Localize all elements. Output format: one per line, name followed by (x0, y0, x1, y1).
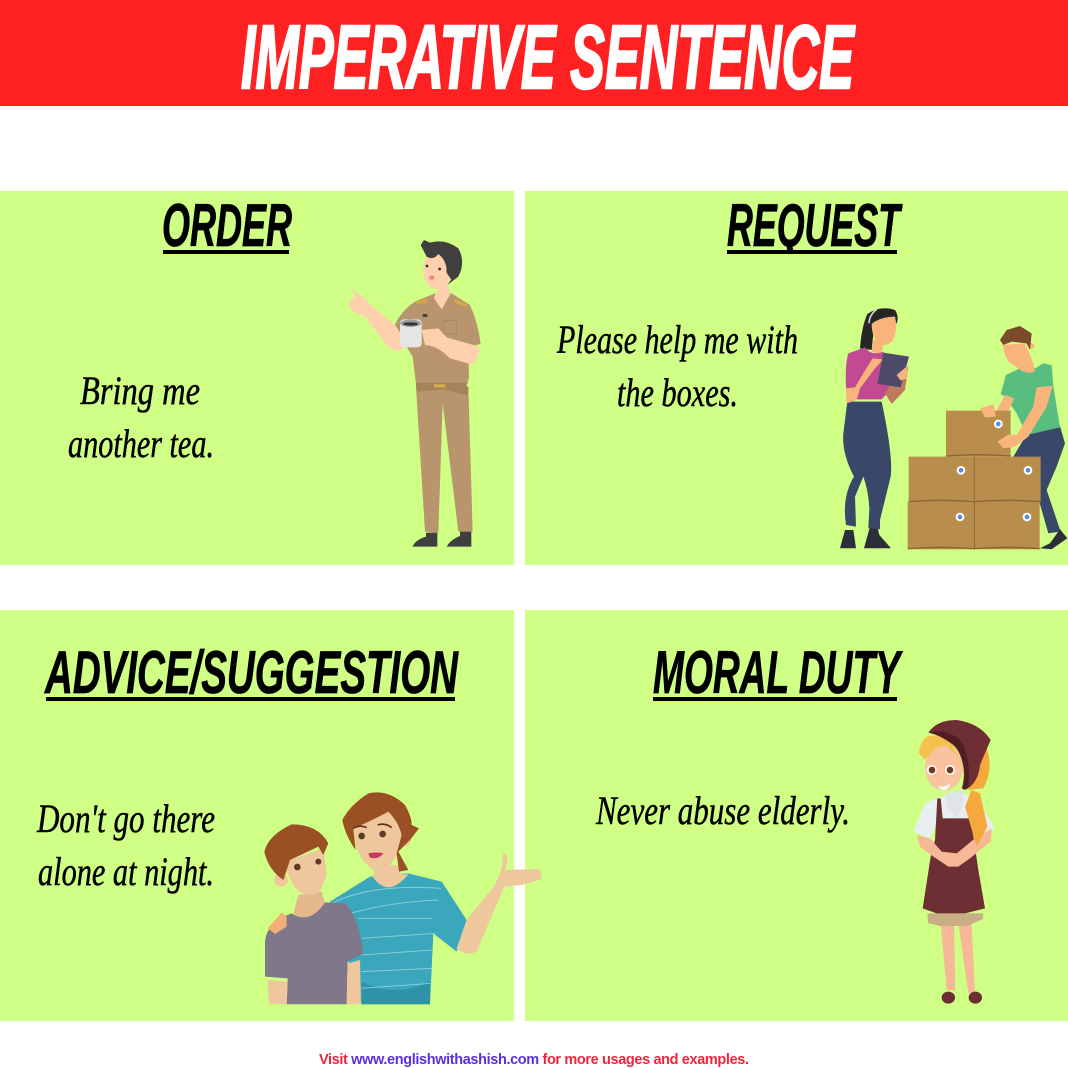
woman (860, 308, 898, 350)
example text: request: the boxes. (617, 370, 738, 415)
example text: advice: alone at night. (38, 849, 214, 894)
panel: order (0, 191, 514, 565)
icon: officer with mug (349, 240, 481, 547)
heading: order: ORDER (162, 192, 292, 259)
panel: moral duty (525, 610, 1068, 1021)
heading: moral duty (653, 639, 903, 706)
example text: advice: Don't go there (36, 796, 215, 841)
example text: request: Please help me with (556, 317, 798, 362)
icon: woman with tablet and man stacking boxes (840, 308, 1067, 549)
footer: Visit www.englishwithashish.com for more usages and examples. (319, 1052, 749, 1068)
boxes (946, 411, 1011, 457)
heading: advice/suggestion: ADVICE/SUGGESTION (44, 639, 459, 706)
panel: request (525, 191, 1068, 565)
example text: moral duty: Never abuse elderly. (595, 788, 850, 833)
heading: request: REQUEST (727, 192, 903, 259)
heading: moral duty: MORAL DUTY (653, 639, 903, 706)
icon: girl in apron (913, 720, 995, 1004)
example text: order: another tea. (68, 421, 214, 466)
man (1013, 426, 1065, 533)
icon: two boys talking (264, 792, 542, 1004)
title banner (0, 0, 1068, 108)
heading: advice/suggestion (44, 639, 459, 706)
heading: order (162, 192, 292, 259)
example text: order: Bring me (80, 368, 200, 413)
panel: advice/suggestion (0, 610, 514, 1021)
heading: request (727, 192, 903, 262)
